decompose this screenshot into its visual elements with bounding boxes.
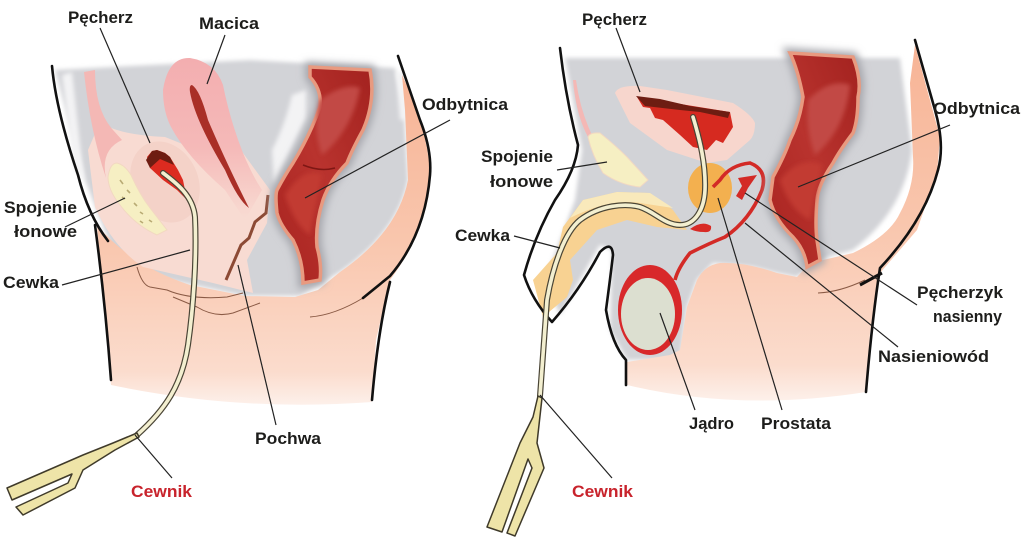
labels: female: Pochwa <box>255 429 322 448</box>
bulb <box>690 224 711 232</box>
panel: male anatomy <box>487 28 950 536</box>
labels: male: Cewka <box>455 226 511 245</box>
labels: male: Pęcherz <box>582 10 647 29</box>
skin <box>97 75 430 405</box>
labels: female: Odbytnica <box>422 95 509 114</box>
penis <box>533 192 687 317</box>
catheter <box>487 117 705 536</box>
panel: female anatomy <box>7 28 450 515</box>
pale pelvic tissue <box>88 100 270 293</box>
rectum <box>770 53 859 267</box>
vas deferens <box>675 163 764 280</box>
labels: male: Odbytnica <box>933 99 1021 118</box>
pink abdominal strip <box>84 70 122 178</box>
labels: male: Nasieniowód <box>878 347 989 366</box>
uterus <box>163 58 262 220</box>
seminal vesicle <box>736 175 757 200</box>
labels: male: Jądro <box>689 414 734 433</box>
grey pelvic cavity <box>545 58 912 360</box>
pink abdominal strip <box>573 80 592 137</box>
leader lines <box>514 28 950 478</box>
labels: male: Pęcherzyk <box>917 283 1004 302</box>
labels: female <box>3 8 509 501</box>
groin crease <box>818 280 865 293</box>
labels: female: Macica <box>199 14 260 33</box>
prostate <box>688 163 732 213</box>
bladder <box>615 86 755 163</box>
white patches in cavity <box>62 72 408 185</box>
pubic bone <box>588 133 648 187</box>
pubic bone <box>108 163 167 235</box>
labels: female: Pęcherz <box>68 8 133 27</box>
labels: male: Prostata <box>761 414 832 433</box>
body outline <box>52 56 430 400</box>
labia lines <box>137 267 363 317</box>
labels: male: Spojenie <box>481 147 553 166</box>
labels: female: Spojenie <box>4 198 77 217</box>
bladder <box>117 130 213 234</box>
rectum <box>276 67 372 283</box>
labels: male: Cewnik <box>572 482 634 501</box>
skin <box>627 45 940 401</box>
leader lines <box>62 28 450 478</box>
body outline <box>524 40 941 392</box>
labels: male: nasienny <box>933 307 1003 326</box>
grey pelvic cavity <box>55 60 408 296</box>
vagina <box>226 195 268 280</box>
labels: female: Cewka <box>3 273 60 292</box>
labels: female: Cewnik <box>131 482 193 501</box>
labels: female: łonowe <box>14 222 77 241</box>
testis <box>618 265 682 355</box>
catheter <box>7 173 196 515</box>
labels: male <box>455 10 1021 501</box>
labels: male: łonowe <box>490 172 553 191</box>
